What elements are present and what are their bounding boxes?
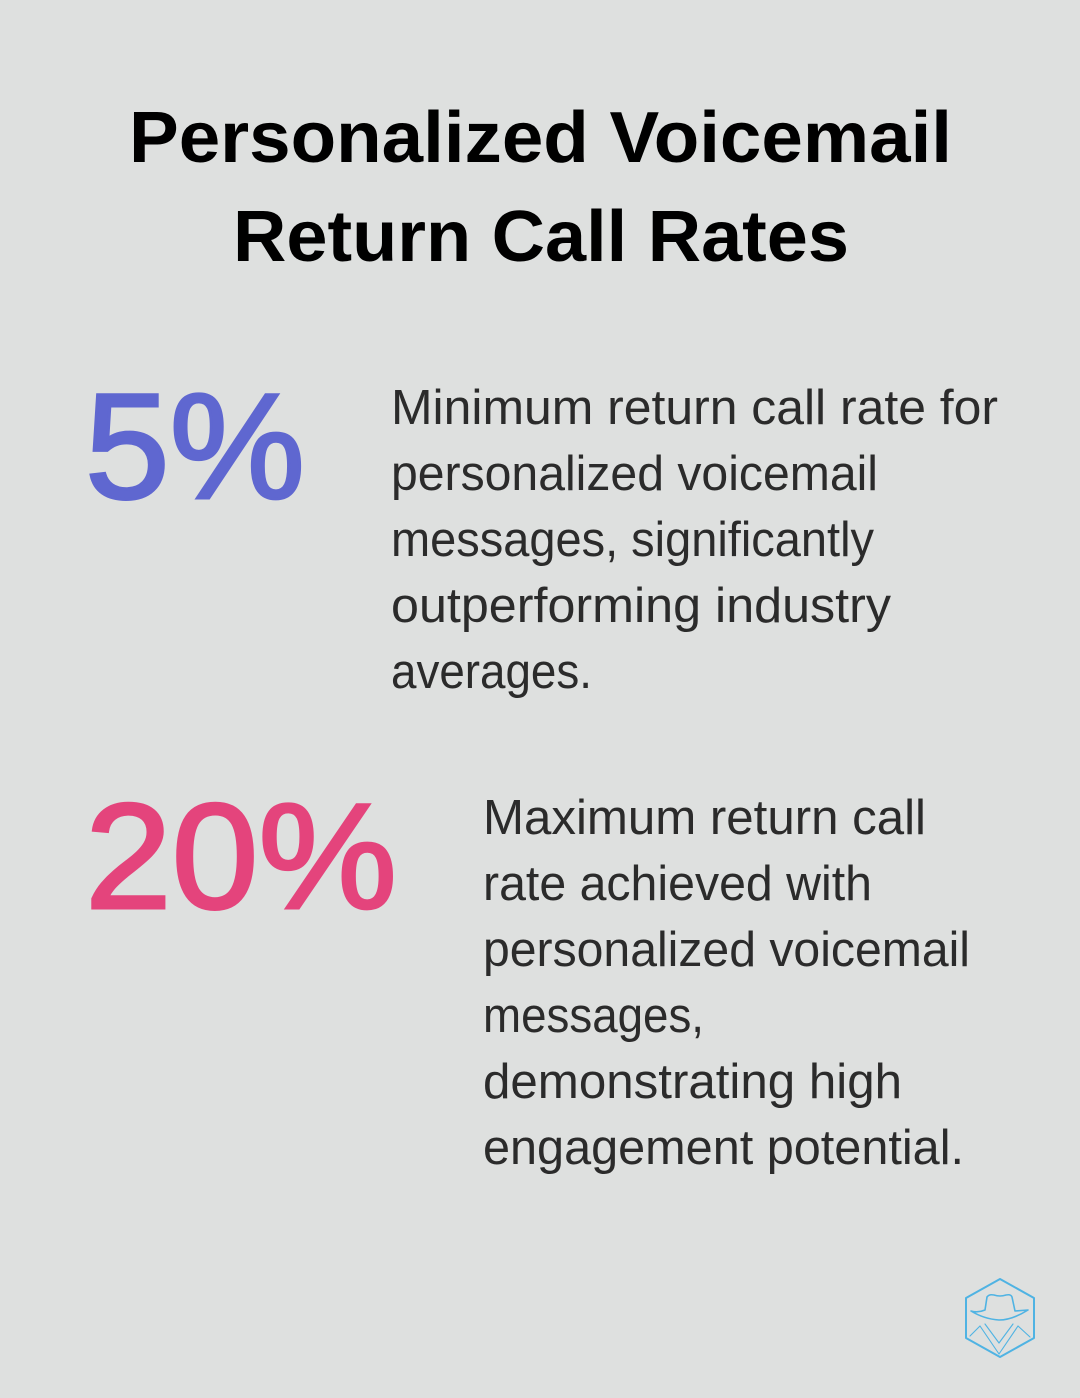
description: maximum return call rate: Maximum return call (483, 791, 926, 845)
stat: 20% (85, 772, 970, 1175)
description: minimum return call rate: Minimum return call rate for (391, 381, 998, 435)
icon: hat and coat logo (966, 1279, 1034, 1357)
stat: 5% (85, 362, 998, 699)
description: minimum return call rate: messages, significantly (391, 513, 874, 567)
description: maximum return call rate: rate achieved with (483, 857, 872, 911)
description: maximum return call rate: messages, (483, 989, 704, 1043)
description: maximum return call rate (483, 791, 970, 1175)
title: Return Call Rates (233, 197, 849, 277)
title: Personalized Voicemail (129, 98, 952, 178)
number: 5%: 5% (85, 362, 305, 530)
description: maximum return call rate: engagement potential. (483, 1121, 964, 1175)
description: minimum return call rate (391, 381, 998, 699)
description: minimum return call rate: averages. (391, 645, 592, 699)
title (129, 98, 952, 277)
description: minimum return call rate: outperforming industry (391, 579, 892, 633)
description: maximum return call rate: demonstrating high (483, 1055, 902, 1109)
description: maximum return call rate: personalized voicemail (483, 923, 970, 977)
description: minimum return call rate: personalized voicemail (391, 447, 878, 501)
number: 20%: 20% (85, 772, 397, 940)
